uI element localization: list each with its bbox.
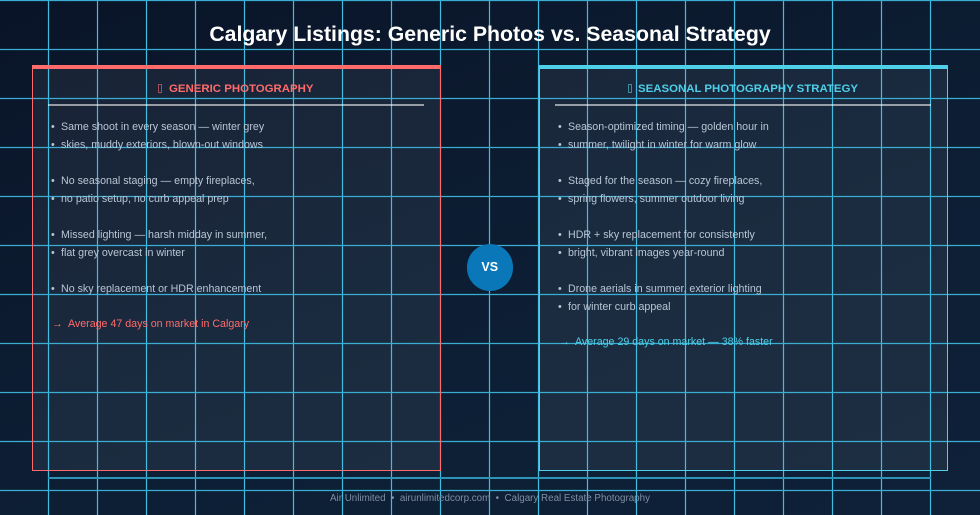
VS badge: VS — [481, 260, 498, 274]
heading: seasonal strategy: SEASONAL PHOTOGRAPHY STRATEGY — [638, 83, 858, 95]
generic list — [51, 121, 267, 330]
title: Calgary Listings: Generic Photos vs. Seasonal Strategy — [209, 22, 771, 46]
generic list: → Average 47 days on market in Calgary — [52, 318, 249, 330]
seasonal list: Staged for the season — cozy fireplaces, — [568, 175, 762, 187]
heading rule right — [555, 104, 931, 106]
generic list: Same shoot in every season — winter grey — [61, 121, 264, 133]
VS badge — [466, 244, 513, 290]
heading rule left — [48, 104, 424, 106]
generic list: Missed lighting — harsh midday in summer, — [61, 229, 267, 241]
footer rule — [48, 477, 931, 478]
seasonal list — [558, 121, 773, 348]
panel: seasonal photography strategy — [539, 65, 948, 471]
generic list: skies, muddy exteriors, blown-out windows — [61, 139, 263, 151]
seasonal list: HDR + sky replacement for consistently — [568, 229, 755, 241]
generic list: flat grey overcast in winter — [61, 247, 185, 259]
seasonal list: bright, vibrant images year-round — [568, 247, 724, 259]
footer: Air Unlimited • airunlimitedcorp.com • Calgary Real Estate Photography — [330, 493, 650, 504]
generic list: no patio setup, no curb appeal prep — [61, 193, 229, 205]
panel: generic photography — [32, 65, 441, 471]
heading: generic photography: GENERIC PHOTOGRAPHY — [169, 83, 314, 95]
seasonal list: spring flowers, summer outdoor living — [568, 193, 744, 205]
icon: missing glyph left — [158, 84, 162, 93]
seasonal list: for winter curb appeal — [568, 301, 670, 313]
seasonal list: Drone aerials in summer, exterior lighting — [568, 283, 762, 295]
icon: missing glyph right — [628, 84, 632, 93]
seasonal list: → Average 29 days on market — 38% faster — [559, 336, 773, 348]
generic list: No seasonal staging — empty fireplaces, — [61, 175, 255, 187]
seasonal list: summer, twilight in winter for warm glow — [568, 139, 756, 151]
seasonal list: Season-optimized timing — golden hour in — [568, 121, 769, 133]
generic list: No sky replacement or HDR enhancement — [61, 283, 261, 295]
